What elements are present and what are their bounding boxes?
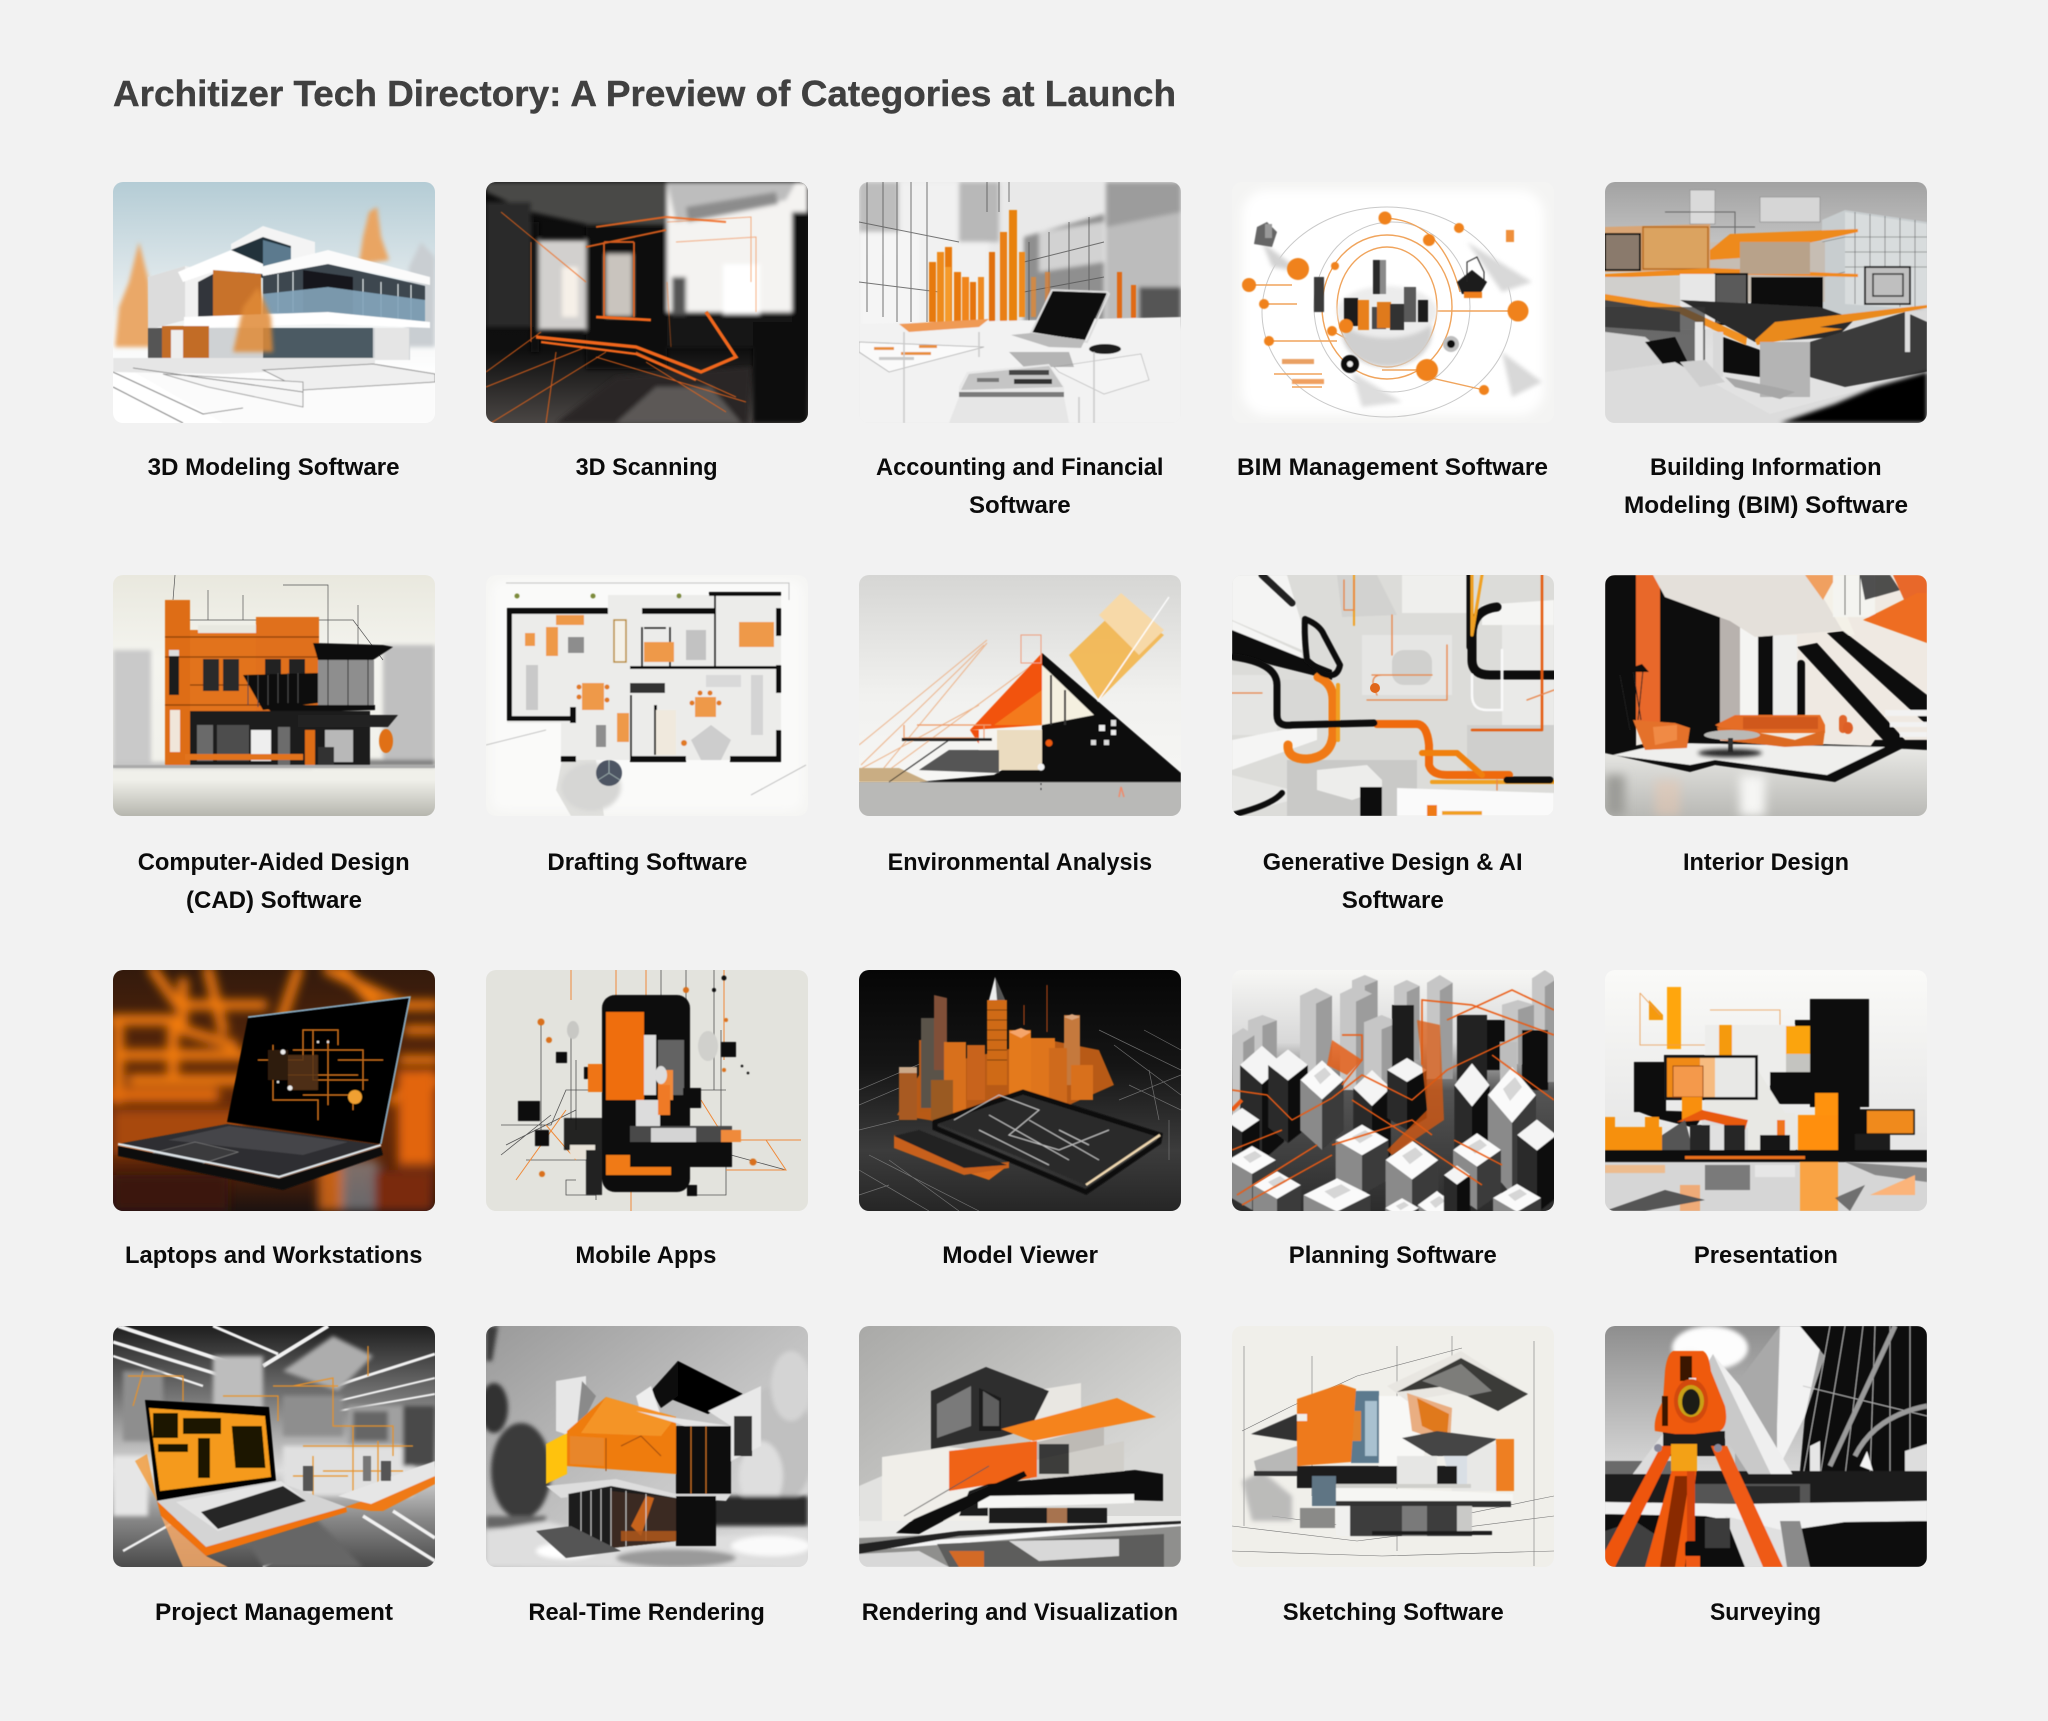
image: office desk with bars [859, 182, 1181, 422]
label: Sketching Software [1283, 1599, 1504, 1626]
card: Surveying [1605, 1326, 1927, 1630]
image: ink and orange architecture sketch [1232, 1326, 1554, 1566]
image: modern house sketch [113, 182, 435, 423]
card: Environmental Analysis [859, 575, 1181, 880]
label: Accounting and Financial [876, 454, 1164, 481]
label: Model Viewer [942, 1242, 1098, 1269]
image: laptop on orange glow [113, 970, 435, 1211]
card: Building Information Modeling (BIM) Software [1605, 182, 1927, 538]
title: Architizer Tech Directory: A Preview of Categories at Launch [113, 73, 1176, 114]
card: Laptops and Workstations [113, 970, 435, 1273]
label: Rendering and Visualization [862, 1599, 1178, 1626]
label [859, 447, 1181, 523]
card: Drafting Software [486, 575, 808, 880]
image: orange total station on tripod [1605, 1326, 1927, 1566]
image: modernist building with orange roof [859, 1326, 1181, 1566]
label: Interior Design [1683, 849, 1849, 876]
label: Computer-Aided Design [138, 849, 410, 876]
card: Presentation [1605, 970, 1927, 1273]
label: 3D Modeling Software [148, 454, 400, 481]
image: orange brick building elevation [113, 575, 435, 816]
image: abstract generative pipes [1232, 575, 1554, 816]
label: Mobile Apps [575, 1242, 716, 1269]
image: laptop with holographic model [113, 1326, 435, 1566]
label: Modeling (BIM) Software [1624, 492, 1908, 519]
card: Real-Time Rendering [486, 1326, 808, 1630]
image: floor plan [486, 575, 808, 816]
card: Sketching Software [1232, 1326, 1554, 1630]
label [1232, 842, 1554, 918]
label: Environmental Analysis [888, 849, 1152, 876]
image: house with orange box [486, 1326, 808, 1566]
label: Software [969, 492, 1071, 519]
card: Rendering and Visualization [859, 1326, 1181, 1630]
label: Software [1342, 887, 1444, 914]
card: 3D Modeling Software [113, 182, 435, 481]
label: Real-Time Rendering [528, 1599, 765, 1626]
image: isometric city [1232, 970, 1554, 1211]
label: Generative Design & AI [1263, 849, 1523, 876]
card: Interior Design [1605, 575, 1927, 880]
label: Project Management [155, 1599, 393, 1626]
card: Planning Software [1232, 970, 1554, 1273]
label: 3D Scanning [576, 454, 718, 481]
label [1605, 447, 1927, 523]
card: Generative Design & AI Software [1232, 575, 1554, 918]
card: Project Management [113, 1326, 435, 1630]
label: BIM Management Software [1237, 454, 1548, 481]
image: cutaway building [1605, 182, 1927, 422]
label [113, 842, 435, 918]
label: (CAD) Software [186, 887, 362, 914]
image: abstract orange and black building [1605, 970, 1927, 1211]
card: Model Viewer [859, 970, 1181, 1273]
label: Building Information [1650, 454, 1882, 481]
card: 3D Scanning [486, 182, 808, 481]
image: BIM network diagram [1232, 182, 1554, 422]
image: exploded smartphone [486, 970, 808, 1211]
label: Laptops and Workstations [125, 1242, 422, 1269]
card: Computer-Aided Design (CAD) Software [113, 575, 435, 918]
card: Accounting and Financial Software [859, 182, 1181, 538]
image: interior scan [486, 182, 808, 423]
card: BIM Management Software [1232, 182, 1554, 500]
label: Presentation [1694, 1242, 1838, 1269]
image: orange city model on tablet [859, 970, 1181, 1211]
label: Planning Software [1289, 1242, 1497, 1269]
card: Mobile Apps [486, 970, 808, 1273]
image: interior with staircase [1605, 575, 1927, 816]
label: Surveying [1710, 1599, 1821, 1626]
image: triangular house [859, 575, 1181, 816]
label: Drafting Software [547, 849, 747, 876]
